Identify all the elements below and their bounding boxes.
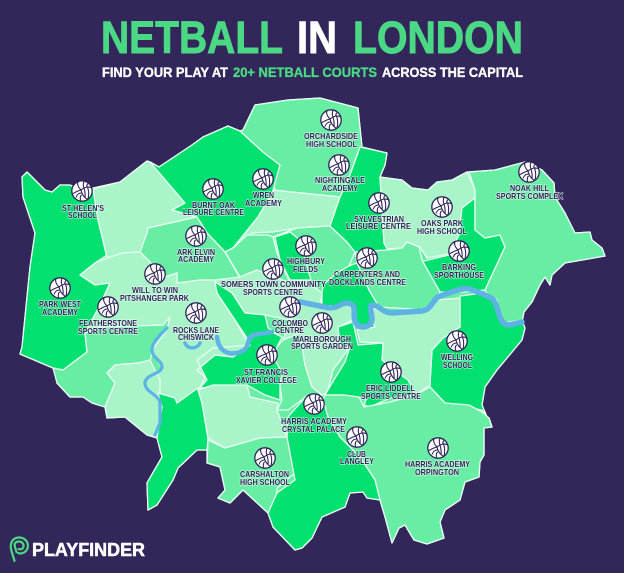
marker: Welling School (441, 331, 473, 370)
marker: Carpenters and Docklands Centre: DOCKLANDS CENTRE (329, 277, 406, 287)
marker: Carpenters and Docklands Centre (329, 248, 406, 287)
marker: Highbury Fields (287, 236, 325, 274)
marker: Oaks Park High School: HIGH SCHOOL (417, 226, 467, 236)
marker: Barking Sporthouse: SPORTHOUSE (434, 270, 484, 280)
marker: Park West Academy: ACADEMY (42, 307, 78, 317)
marker: Nightingale Academy: ACADEMY (322, 183, 358, 193)
marker: Nightingale Academy: NIGHTINGALE (315, 175, 365, 185)
marker: Somers Town Community Sports Centre: SPORTS CENTRE (243, 287, 303, 297)
marker: Sylvestrian Leisure Centre: LEISURE CENTRE (346, 221, 411, 231)
marker: Marlborough Sports Garden (291, 313, 353, 351)
marker: St Helen's School: SCHOOL (68, 210, 97, 220)
marker: Rocks Lane Chiswick: ROCKS LANE (173, 325, 219, 335)
title: NETBALL (101, 12, 283, 63)
marker: Highbury Fields: HIGHBURY (287, 256, 325, 266)
marker: Noak Hill Sports Complex: SPORTS COMPLEX (496, 191, 563, 201)
marker: Colombo Centre: CENTRE (275, 325, 304, 335)
marker: Nightingale Academy (315, 155, 365, 193)
marker: Somers Town Community Sports Centre: SOMERS TOWN COMMUNITY (221, 279, 326, 289)
marker: Colombo Centre (272, 297, 308, 335)
marker: Wren Academy: WREN (253, 190, 274, 200)
marker: Will to Win Pitshanger Park (120, 264, 189, 303)
marker: Ark Elvin Academy: ARK ELVIN (177, 247, 215, 257)
title: IN (297, 12, 337, 63)
marker: Carpenters and Docklands Centre: CARPENTERS AND (334, 269, 400, 279)
subtitle: 20+ NETBALL COURTS (233, 65, 377, 80)
marker: Noak Hill Sports Complex (496, 162, 563, 201)
marker: Harris Academy Crystal Palace: HARRIS ACADEMY (281, 416, 347, 426)
marker: Club Langley: LANGLEY (340, 456, 374, 466)
river Thames (145, 289, 522, 435)
marker: Park West Academy (39, 278, 81, 317)
marker: Welling School: WELLING (441, 352, 473, 362)
marker: Marlborough Sports Garden: MARLBOROUGH (293, 334, 351, 344)
marker: Club Langley: CLUB (347, 449, 366, 459)
marker: Eric Liddell Sports Centre: ERIC LIDDELL (366, 383, 415, 393)
subtitle (102, 65, 523, 80)
marker: Noak Hill Sports Complex: NOAK HILL (510, 183, 549, 193)
marker: Barking Sporthouse (434, 241, 484, 280)
map of London boroughs (20, 98, 605, 550)
marker: Burnt Oak Leisure Centre: LEISURE CENTRE (183, 207, 244, 217)
marker: Somers Town Community Sports Centre (221, 259, 326, 297)
marker: Harris Academy Orpington (405, 438, 470, 477)
marker: Burnt Oak Leisure Centre (183, 179, 244, 217)
marker: St Francis Xavier College (236, 345, 297, 385)
marker: Park West Academy: PARK WEST (39, 299, 81, 309)
marker: Ark Elvin Academy: ACADEMY (178, 254, 214, 264)
marker: St Helen's School: ST HELEN'S (62, 203, 104, 213)
marker: Will to Win Pitshanger Park: WILL TO WIN (132, 285, 178, 295)
subtitle: ACROSS THE CAPITAL (382, 65, 523, 80)
marker: Oaks Park High School (417, 197, 467, 236)
marker: Featherstone Sports Centre (78, 297, 138, 336)
marker: St Francis Xavier College: ST FRANCIS (244, 367, 288, 377)
marker: Featherstone Sports Centre: SPORTS CENTRE (78, 326, 138, 336)
logo: Playfinder: PLAYFINDER (32, 540, 145, 560)
marker: Orchardside High School: ORCHARDSIDE (304, 131, 358, 141)
marker: Colombo Centre: COLOMBO (272, 318, 308, 328)
marker: Wren Academy (245, 169, 282, 208)
marker: Club Langley (340, 427, 374, 466)
marker: Wren Academy: ACADEMY (245, 198, 282, 208)
marker: Highbury Fields: FIELDS (293, 264, 318, 274)
marker: Orchardside High School: HIGH SCHOOL (306, 139, 357, 149)
marker: Harris Academy Orpington: HARRIS ACADEMY (405, 459, 470, 469)
venue markers (39, 110, 563, 487)
icon: location pin (11, 538, 28, 561)
marker: St Francis Xavier College: XAVIER COLLEGE (236, 375, 297, 385)
marker: Carshalton High School: HIGH SCHOOL (240, 477, 290, 487)
marker: Sylvestrian Leisure Centre (346, 193, 411, 231)
title: LONDON (353, 12, 523, 63)
marker: Sylvestrian Leisure Centre: SYLVESTRIAN (354, 214, 404, 224)
marker: Carshalton High School: CARSHALTON (240, 469, 289, 479)
marker: Eric Liddell Sports Centre (361, 362, 421, 401)
marker: Rocks Lane Chiswick: CHISWICK (178, 332, 214, 342)
marker: Rocks Lane Chiswick (173, 303, 219, 342)
subtitle: FIND YOUR PLAY AT (102, 65, 229, 80)
marker: Welling School: SCHOOL (443, 360, 472, 370)
marker: Ark Elvin Academy (177, 226, 215, 264)
marker: Carshalton High School (240, 448, 290, 487)
marker: Orchardside High School (304, 110, 358, 149)
marker: Barking Sporthouse: BARKING (442, 262, 476, 272)
marker: Harris Academy Crystal Palace: CRYSTAL PALACE (282, 424, 345, 434)
marker: Burnt Oak Leisure Centre: BURNT OAK (192, 200, 235, 210)
marker: St Helen's School (62, 181, 104, 220)
marker: Eric Liddell Sports Centre: SPORTS CENTRE (361, 391, 421, 401)
marker: Harris Academy Crystal Palace (281, 394, 347, 434)
marker: Marlborough Sports Garden: SPORTS GARDEN (291, 341, 353, 351)
marker: Will to Win Pitshanger Park: PITSHANGER PARK (120, 293, 189, 303)
marker: Featherstone Sports Centre: FEATHERSTONE (79, 318, 137, 328)
marker: Harris Academy Orpington: ORPINGTON (415, 467, 459, 477)
title (101, 12, 523, 63)
marker: Oaks Park High School: OAKS PARK (421, 218, 463, 228)
